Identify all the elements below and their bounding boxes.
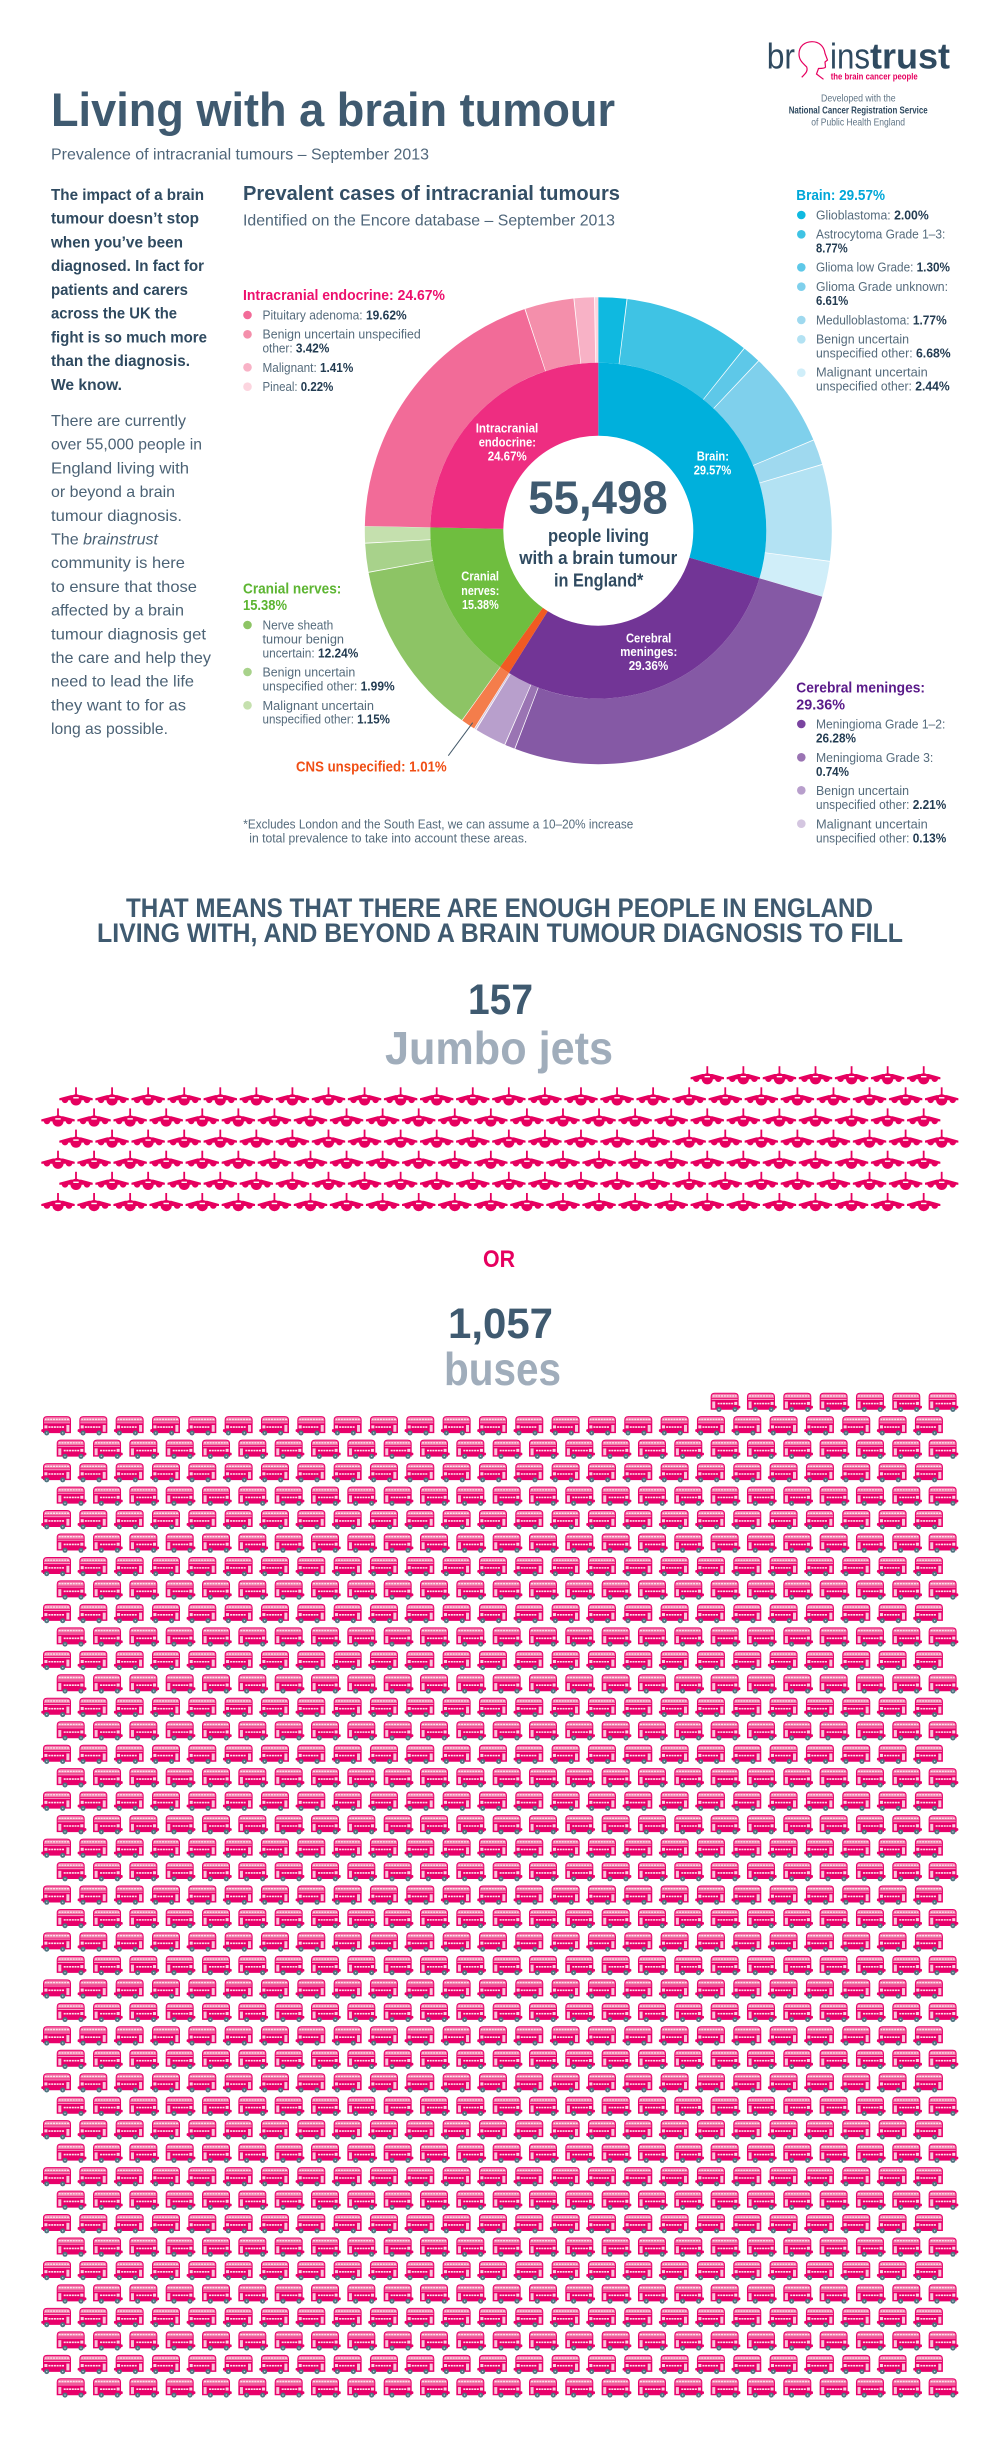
intro text block: bold xyxy=(50,187,207,394)
logo: brainstrust: ins xyxy=(830,35,870,76)
legend: cerebral meninges: unspecified other: 0.13% xyxy=(816,831,946,845)
legend: cerebral meninges: Malignant uncertain xyxy=(816,817,928,831)
legend: brain: Glioma Grade unknown: xyxy=(816,280,948,294)
legend: cranial nerves: Malignant uncertain xyxy=(262,699,374,713)
intro text block: bold: patients and carers xyxy=(51,282,188,299)
subtitle: Prevalence of intracranial tumours – September 2013 xyxy=(51,146,429,164)
label: buses: buses xyxy=(444,1343,561,1395)
ring label: brain xyxy=(694,450,731,478)
intro text block: bold: We know. xyxy=(51,377,122,394)
legend: brain: Brain: 29.57% xyxy=(796,187,885,204)
logo: brainstrust xyxy=(767,35,950,82)
comparison heading: LIVING WITH, AND BEYOND A BRAIN TUMOUR DIAGNOSIS TO FILL xyxy=(97,918,903,948)
legend: cerebral meninges: Benign uncertain xyxy=(816,784,909,798)
intro text block: regular xyxy=(51,413,211,738)
legend: brain: Glioblastoma: 2.00% xyxy=(816,208,929,222)
legend: cerebral meninges: Meningioma Grade 3: xyxy=(816,751,933,765)
legend: cranial nerves: uncertain: 12.24% xyxy=(262,646,358,660)
legend: intracranial endocrine: Malignant: 1.41% xyxy=(262,361,353,375)
intro text block: regular: they want to for as xyxy=(51,697,186,714)
intro text block: regular: or beyond a brain xyxy=(51,484,175,501)
intro text block: bold: fight is so much more xyxy=(51,329,207,346)
legend: brain: unspecified other: 2.44% xyxy=(816,380,950,394)
chart heading xyxy=(243,183,620,230)
credit text: of Public Health England xyxy=(811,118,905,129)
legend: cerebral meninges: 26.28% xyxy=(816,732,856,746)
intro text block: regular: to ensure that those xyxy=(51,579,197,596)
legend: intracranial endocrine: other: 3.42% xyxy=(262,342,329,356)
comparison heading: THAT MEANS THAT THERE ARE ENOUGH PEOPLE IN ENGLAND xyxy=(126,893,873,923)
logo: brainstrust: the brain cancer people xyxy=(831,71,918,82)
legend: brain: 8.77% xyxy=(816,242,848,256)
intro text block: bold: The impact of a brain xyxy=(51,187,204,204)
icon grid: 157 jumbo jets xyxy=(41,1066,958,1211)
intro text block: regular: England living with xyxy=(51,460,189,477)
donut chart xyxy=(398,330,799,731)
legend: cerebral meninges: 29.36% xyxy=(796,696,845,713)
connector word: OR: OR xyxy=(483,1246,515,1273)
number: 157: 157 xyxy=(468,976,533,1024)
centre total: people living xyxy=(548,526,649,546)
inner ring: main categories xyxy=(467,399,730,662)
centre total: 55,498 xyxy=(528,471,668,523)
legend: brain: Glioma low Grade: 1.30% xyxy=(816,261,950,275)
legend: cranial nerves: 15.38% xyxy=(243,597,287,614)
label: CNS unspecified: CNS unspecified: 1.01% xyxy=(296,759,447,776)
intro text block: regular: The brainstrust xyxy=(51,532,159,548)
legend: brain: unspecified other: 6.68% xyxy=(816,347,951,361)
intro text block: regular: the care and help they xyxy=(51,650,211,667)
label: Jumbo jets: Jumbo jets xyxy=(385,1022,613,1074)
intro text block: regular: need to lead the life xyxy=(51,674,194,691)
legend: cranial nerves: Benign uncertain xyxy=(262,666,355,680)
ring label: cranial nerves xyxy=(461,569,499,612)
legend: cerebral meninges xyxy=(796,680,946,845)
title: Living with a brain tumour xyxy=(51,83,615,136)
legend: brain xyxy=(796,187,951,394)
legend: cranial nerves: Nerve sheath xyxy=(262,618,333,632)
legend: cranial nerves: tumour benign xyxy=(262,632,344,646)
ring label: cerebral meninges: meninges: xyxy=(620,645,677,659)
ring label: intracranial endocrine: 24.67% xyxy=(488,450,527,464)
intro text block: bold: tumour doesn’t stop xyxy=(51,211,199,228)
ring label: cranial nerves: 15.38% xyxy=(462,598,499,612)
legend: cranial nerves: unspecified other: 1.99% xyxy=(262,680,395,694)
chart heading: Identified on the Encore database – September 2013 xyxy=(243,213,615,230)
credit text xyxy=(789,94,928,129)
credit text: National Cancer Registration Service xyxy=(789,106,928,117)
ring label: intracranial endocrine: endocrine: xyxy=(479,436,536,450)
ring label: cranial nerves: Cranial xyxy=(461,569,499,583)
number: 1,057: 1,057 xyxy=(448,1300,553,1348)
legend: intracranial endocrine: Pituitary adenoma: 19.62% xyxy=(262,308,407,322)
legend: brain: Astrocytoma Grade 1–3: xyxy=(816,228,945,242)
centre total xyxy=(518,471,677,590)
logo: brainstrust: br xyxy=(767,35,795,76)
ring label: cranial nerves: nerves: xyxy=(461,584,499,598)
legend: cerebral meninges: 0.74% xyxy=(816,765,849,779)
intro text block: bold: diagnosed. In fact for xyxy=(51,258,204,275)
footnote xyxy=(243,817,633,845)
leader line: CNS unspecified xyxy=(448,723,473,756)
chart heading: Prevalent cases of intracranial tumours xyxy=(243,183,620,205)
intro text block: bold: across the UK the xyxy=(51,306,177,323)
credit text: Developed with the xyxy=(821,94,896,105)
footnote: *Excludes London and the South East, we can assume a 10–20% increase xyxy=(243,817,633,831)
legend: cranial nerves: unspecified other: 1.15% xyxy=(262,713,390,727)
intro text block: regular: There are currently xyxy=(51,413,186,430)
legend: cerebral meninges: Meningioma Grade 1–2: xyxy=(816,718,945,732)
legend: intracranial endocrine: Intracranial endocrine: 24.67% xyxy=(243,287,445,304)
intro text block: regular: long as possible. xyxy=(51,721,168,738)
legend: intracranial endocrine: Benign uncertain unspecified xyxy=(262,328,421,342)
intro text block: regular: community is here xyxy=(51,555,185,572)
ring label: cerebral meninges: Cerebral xyxy=(626,631,671,645)
legend: intracranial endocrine: Pineal: 0.22% xyxy=(262,380,333,394)
legend: intracranial endocrine xyxy=(243,287,445,394)
intro text block: bold: when you’ve been xyxy=(50,234,183,252)
legend: brain: Medulloblastoma: 1.77% xyxy=(816,313,947,327)
legend: cerebral meninges: unspecified other: 2.21% xyxy=(816,798,946,812)
intro text block: bold: than the diagnosis. xyxy=(51,353,190,370)
intro text block: regular: over 55,000 people in xyxy=(51,437,202,454)
centre total: with a brain tumour xyxy=(518,548,677,568)
legend: brain: Malignant uncertain xyxy=(816,366,928,380)
intro text block: regular: tumour diagnosis. xyxy=(51,508,182,525)
ring label: intracranial endocrine: Intracranial xyxy=(476,422,538,436)
intro text block: regular: tumour diagnosis get xyxy=(51,626,207,643)
legend: cranial nerves xyxy=(243,580,395,727)
ring label: cerebral meninges xyxy=(620,631,677,673)
legend: cranial nerves: Cranial nerves: xyxy=(243,580,341,597)
ring label: intracranial endocrine xyxy=(476,422,538,464)
footnote: in total prevalence to take into account these areas. xyxy=(249,831,527,845)
legend: brain: Benign uncertain xyxy=(816,333,909,347)
logo: brainstrust: trust xyxy=(870,35,950,76)
outer ring: sub-types xyxy=(398,330,799,731)
ring label: brain: Brain: xyxy=(697,450,729,464)
icon: head outline xyxy=(799,42,828,79)
ring label: cerebral meninges: 29.36% xyxy=(629,659,668,673)
ring label: brain: 29.57% xyxy=(694,464,731,478)
icon grid: 1,057 buses xyxy=(41,1393,958,2398)
legend: brain: 6.61% xyxy=(816,294,848,308)
intro text block: regular: affected by a brain xyxy=(51,603,184,620)
comparison heading xyxy=(97,893,903,948)
centre total: in England* xyxy=(554,570,643,590)
legend: cerebral meninges: Cerebral meninges: xyxy=(796,680,925,697)
